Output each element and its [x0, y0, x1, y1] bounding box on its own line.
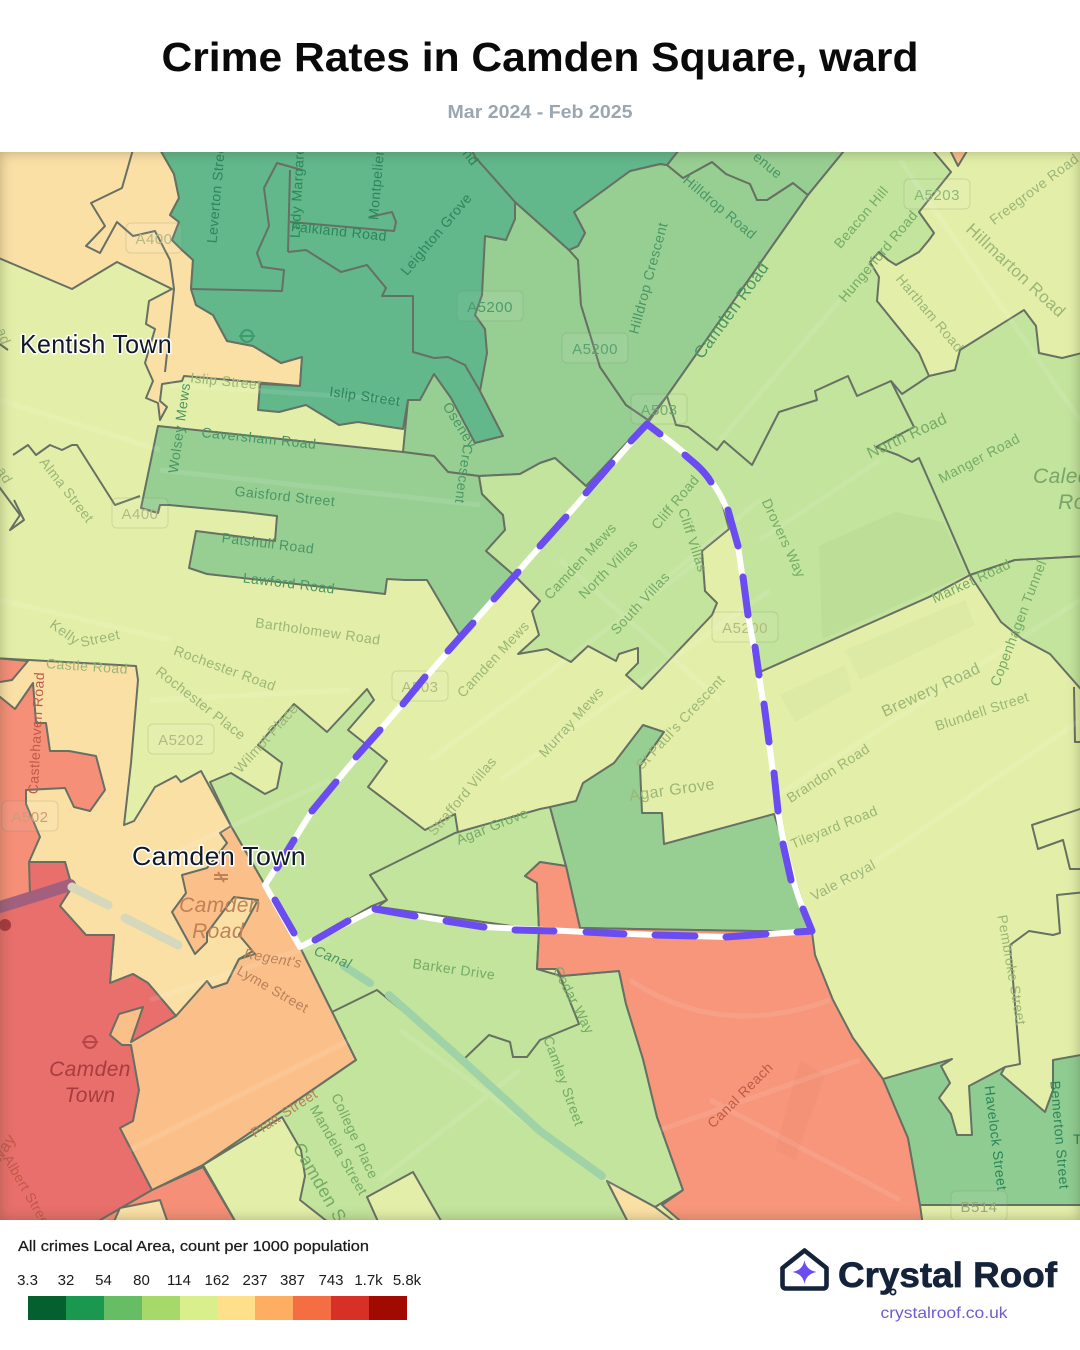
street labels: Bartholomew Road — [254, 614, 382, 648]
street labels: Gaisford Street — [234, 483, 336, 509]
ward boundary: Camden Square — [265, 424, 812, 947]
street labels: Castlehaven Road — [25, 671, 47, 795]
street labels: Strafford Villas — [424, 753, 500, 839]
subtitle: date range: Mar 2024 - Feb 2025 — [448, 102, 632, 122]
street labels: Cliff Villas — [675, 506, 711, 574]
street labels: Patshull Road — [221, 529, 315, 557]
minor streets and building footprints — [129, 159, 1080, 1202]
street labels: Blundell Street — [933, 688, 1031, 734]
logo: Crystal Roof — [782, 1250, 1057, 1322]
street labels: Camden Mews — [454, 618, 532, 700]
street labels: Rochester Road — [172, 642, 278, 694]
street labels: Oseney — [440, 399, 480, 451]
canal and rail — [0, 885, 602, 1176]
legend title: All crimes Local Area, count per 1000 population — [18, 1239, 369, 1255]
street labels: Leighton Grove — [397, 190, 475, 278]
road number shields: B514 — [960, 1199, 998, 1216]
street labels: Agar Grove — [454, 804, 530, 848]
street labels: Islip Street — [190, 369, 262, 393]
street labels: North Road — [864, 411, 950, 462]
logo: Crystal Roof: Crystal Roof — [838, 1256, 1057, 1295]
street labels: Camden St — [289, 1139, 353, 1231]
street labels: Montpelier — [365, 149, 387, 221]
street labels: Wolsey Mews — [165, 382, 193, 474]
street labels: South Villas — [607, 569, 673, 637]
street labels: Pembroke Street — [994, 914, 1030, 1026]
road number shields: A502 — [11, 809, 49, 826]
road number shields: A5200 — [572, 341, 618, 358]
station and place labels in italics: Camden — [179, 894, 261, 917]
street labels: Cliff Road — [648, 472, 702, 532]
title: Crime Rates in Camden Square, ward — [162, 34, 918, 80]
street labels: Drovers Way — [759, 496, 809, 580]
street labels: Castle Road — [46, 655, 128, 677]
logo: Crystal Roof: crystalroof.co.uk — [880, 1305, 1009, 1322]
road number shields: A503 — [640, 402, 678, 419]
street labels: Lady Margaret — [286, 142, 308, 238]
street labels: Camden Mews — [541, 520, 619, 602]
legend scale: 5.8k — [393, 1272, 422, 1289]
station and place labels in italics — [49, 465, 1080, 1107]
street labels: Lyme Street — [234, 962, 312, 1016]
legend scale: 80 — [133, 1272, 150, 1289]
legend scale: 3.3 — [17, 1272, 38, 1289]
legend scale — [17, 1272, 422, 1320]
street labels: Brandon Road — [784, 740, 872, 806]
street labels: Hillmarton Road — [962, 220, 1069, 321]
street labels: Pratt Street — [248, 1086, 320, 1140]
street labels: Canal Reach — [704, 1059, 776, 1131]
legend scale: 1.7k — [354, 1272, 383, 1289]
choropleth regions — [0, 146, 1080, 1226]
station and place labels in italics: Camden — [49, 1058, 131, 1081]
station and place labels in italics: Town — [64, 1084, 116, 1107]
legend scale: 387 — [280, 1272, 305, 1289]
street labels: Hilldrop Road — [680, 172, 760, 242]
road number shields: A5203 — [914, 187, 960, 204]
street labels: Crescent — [452, 443, 476, 505]
street labels: Hungerford Road — [835, 207, 921, 305]
icon: house with star — [782, 1250, 826, 1288]
road number shields — [2, 179, 1007, 1221]
street labels: Islip Street — [328, 383, 402, 409]
town labels — [20, 329, 306, 871]
street labels: Tileyard Road — [788, 802, 880, 852]
street labels: Alma Street — [37, 454, 97, 526]
road number shields: A5200 — [722, 620, 768, 637]
road number shields: A5200 — [467, 299, 513, 316]
street labels: Vale Royal — [808, 856, 878, 904]
street labels: Wilmot Place — [231, 700, 301, 776]
street labels: Rochester Place — [153, 663, 249, 743]
street labels: North Villas — [575, 536, 641, 602]
legend scale: 237 — [242, 1272, 268, 1289]
street labels: Albert Street — [0, 1152, 56, 1232]
street labels: Bemerton Street — [1047, 1080, 1073, 1190]
legend scale: 32 — [58, 1272, 74, 1289]
street labels: enue — [750, 148, 786, 182]
street labels: Caversham Road — [201, 424, 317, 452]
street labels: Regent's — [243, 945, 303, 971]
street labels: Kelly — [47, 616, 83, 648]
street labels: Mandela Street — [307, 1102, 371, 1198]
legend scale: 114 — [167, 1272, 191, 1289]
legend scale: 743 — [318, 1272, 344, 1289]
street labels: Brewery Road — [879, 660, 983, 721]
street labels: College Place — [328, 1091, 382, 1181]
icon: tube and rail roundels — [0, 330, 255, 1048]
street labels: Leverton Street — [204, 140, 228, 244]
street labels: Market Road — [929, 556, 1013, 606]
street labels: Camley Street — [540, 1034, 588, 1128]
street labels: Hilldrop Crescent — [625, 220, 671, 336]
internal boundary lines — [0, 146, 1080, 1067]
street labels: nd — [460, 146, 482, 168]
town labels: Camden Town — [132, 841, 306, 871]
legend scale: 54 — [95, 1272, 112, 1289]
street labels: Barker Drive — [412, 955, 496, 983]
street labels: Lawford Road — [242, 569, 336, 597]
road number shields: A400 — [135, 231, 173, 248]
street labels: St Paul's Crescent — [632, 672, 728, 772]
street labels: Agar Grove — [628, 776, 716, 805]
road number shields: A5202 — [158, 732, 204, 749]
map edge vignette — [0, 152, 1080, 1220]
street labels: Canal — [312, 942, 354, 972]
street labels: Murray Mews — [535, 684, 607, 760]
legend scale: 162 — [204, 1272, 230, 1289]
street labels: Camden Road — [690, 258, 773, 362]
street labels: Freegrove Road — [986, 150, 1080, 228]
town labels: Kentish Town — [20, 329, 172, 359]
street labels: Falkland Road — [290, 218, 388, 244]
road number shields: A400 — [121, 506, 159, 523]
street labels: Copenhagen Tunnel — [987, 558, 1049, 688]
street labels: Cedar Way — [550, 964, 598, 1036]
street labels: Manger Road — [936, 430, 1022, 486]
road number shields: A503 — [401, 679, 439, 696]
street labels: Beacon Hill — [831, 183, 891, 251]
street labels: Hartham Road — [893, 271, 967, 355]
station and place labels in italics: Road — [192, 920, 245, 943]
street labels: Street — [79, 626, 121, 650]
street labels: Havelock Street — [982, 1085, 1010, 1191]
